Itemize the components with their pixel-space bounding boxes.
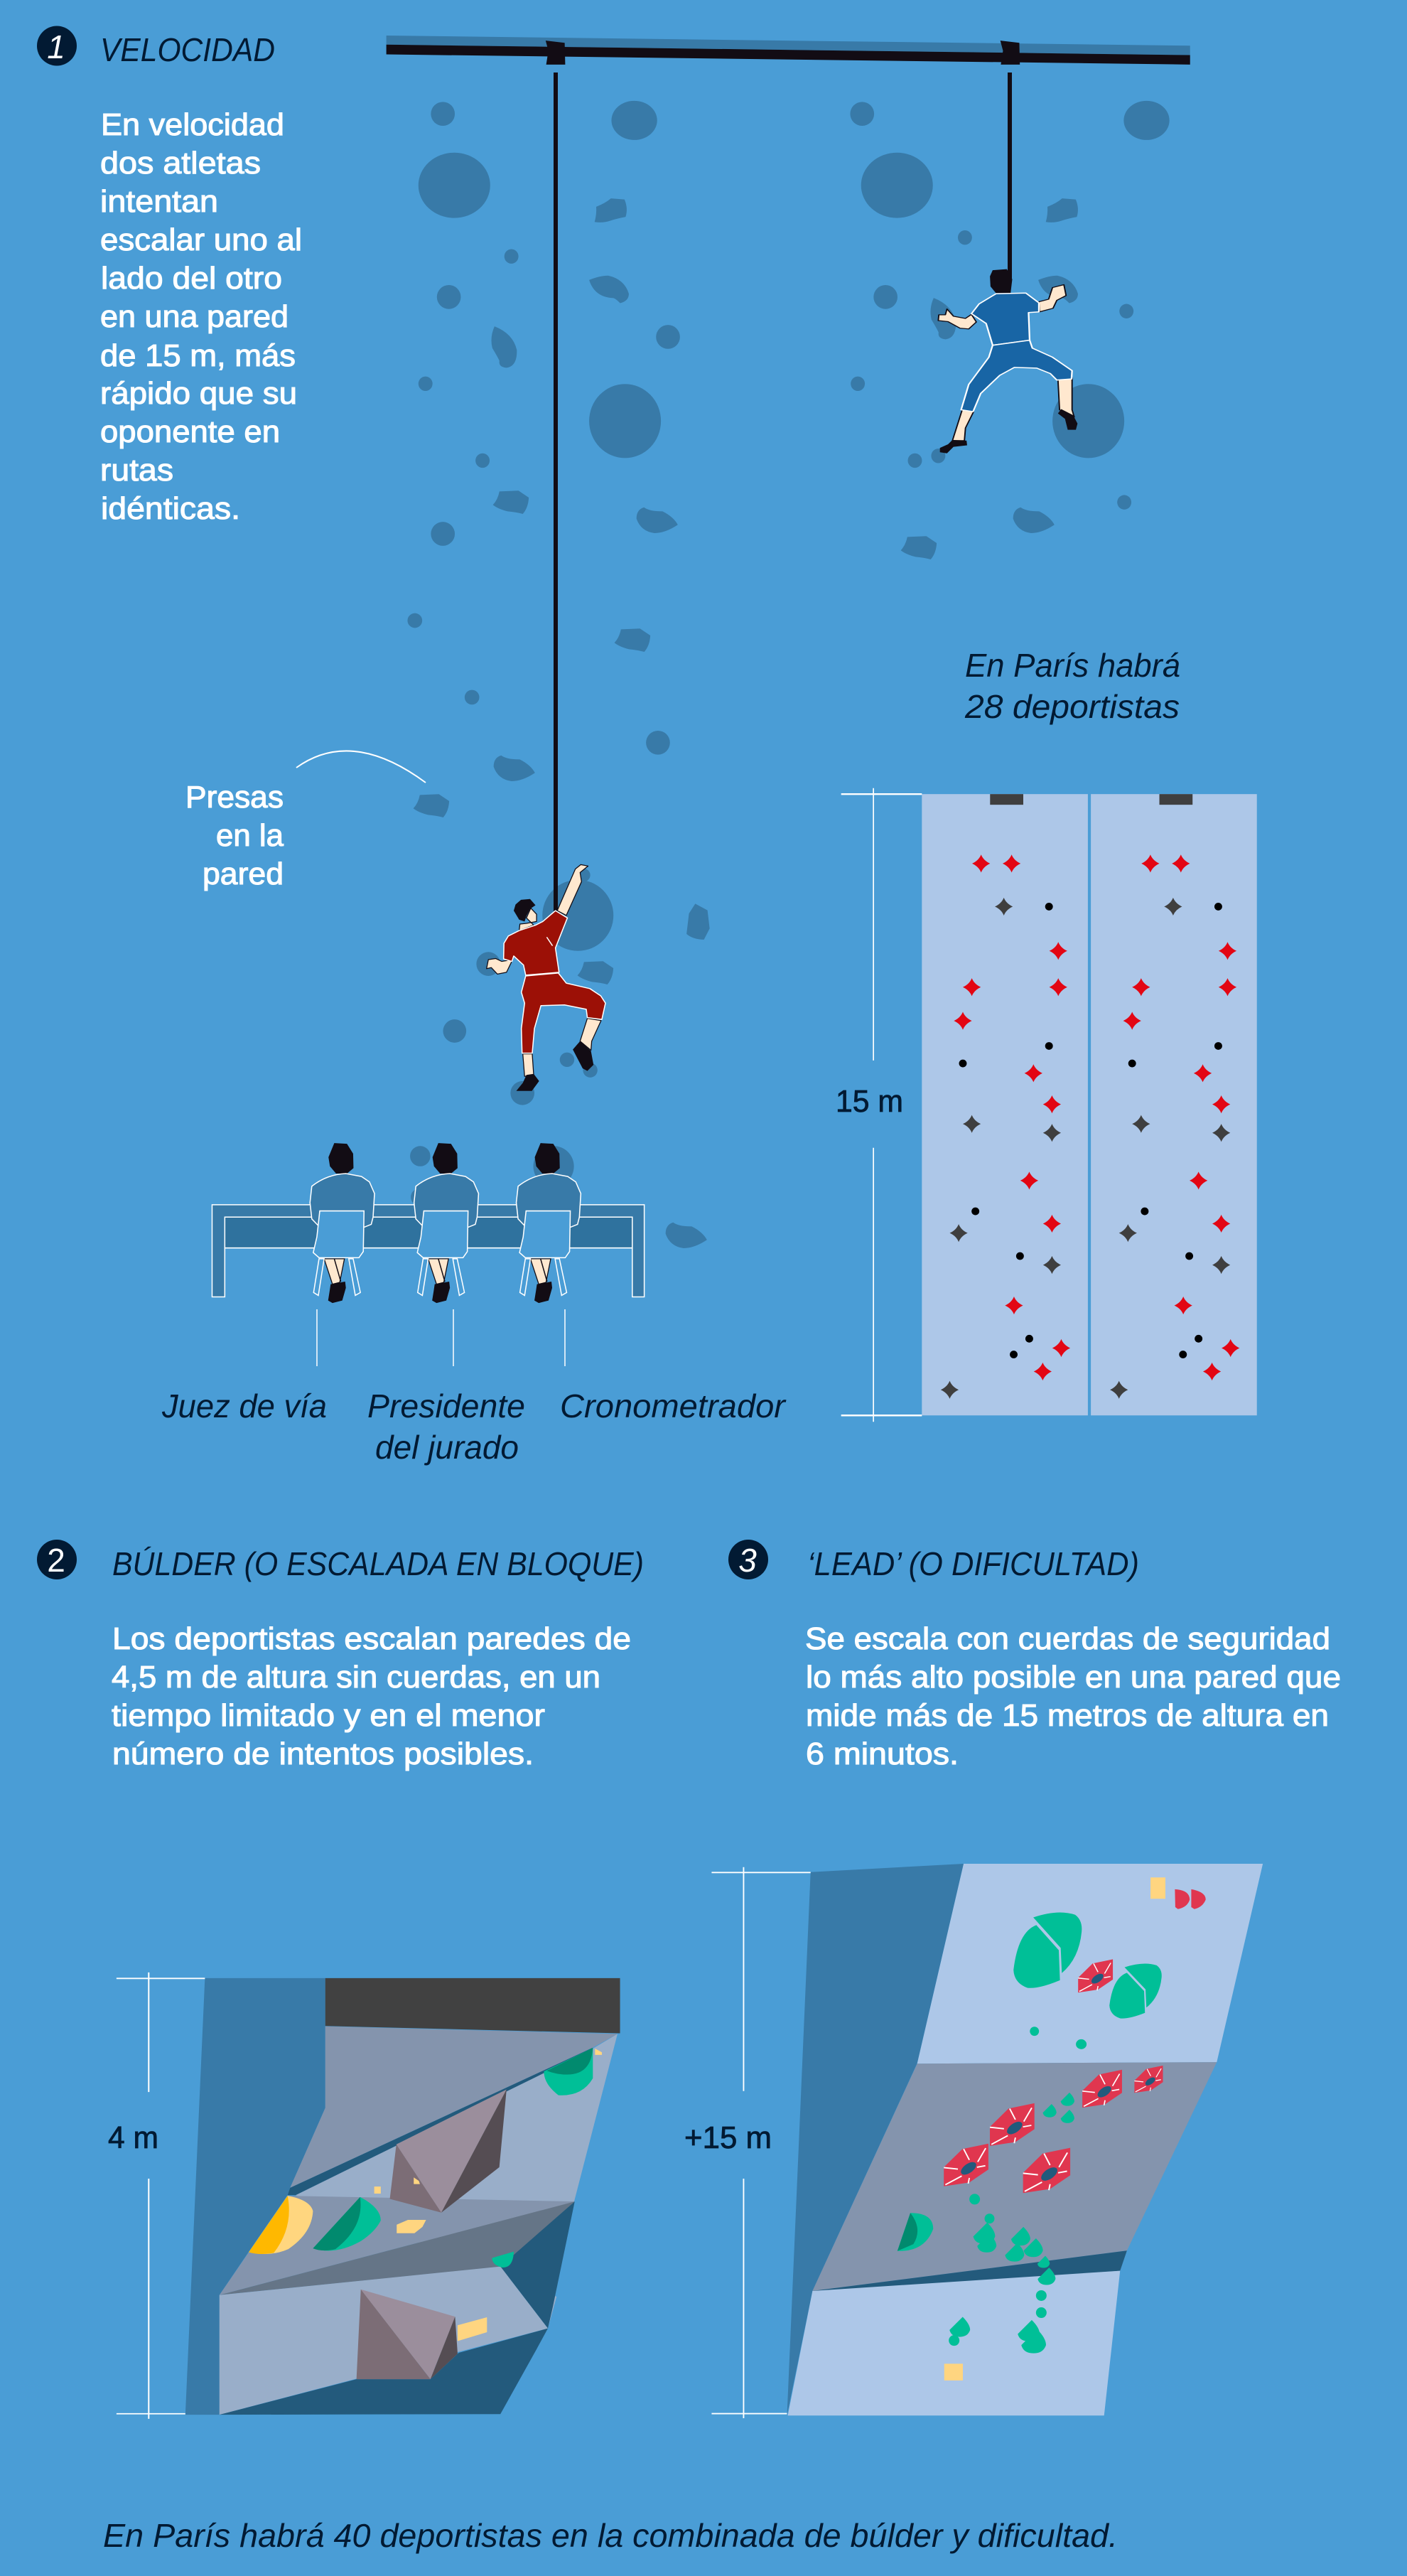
text block: velocidad description: lado del otro xyxy=(101,261,282,296)
text block: búlder description: 4,5 m de altura sin cuerdas, en un xyxy=(112,1660,600,1695)
text block: velocidad description: rápido que su xyxy=(100,376,297,411)
wall lane left xyxy=(922,794,1088,1415)
number badge 3: 3 xyxy=(738,1542,757,1579)
text block: búlder description: número de intentos posibles. xyxy=(112,1737,534,1771)
section 1 heading: velocidad xyxy=(37,26,275,68)
height dimension line xyxy=(711,1867,811,2418)
pyramid hold upper xyxy=(390,2090,507,2213)
green small holds xyxy=(949,2027,1087,2354)
wall lane right xyxy=(1091,794,1257,1415)
speed wall holds xyxy=(407,101,1170,1248)
number badge 3 xyxy=(728,1540,768,1579)
label: 15 m: 15 m xyxy=(836,1084,903,1119)
label: 28 deportistas xyxy=(964,647,1180,725)
label: cronometrador: Cronometrador xyxy=(560,1388,787,1424)
climber: red athlete xyxy=(487,864,605,1091)
callout: presas en la pared: pared xyxy=(203,857,284,891)
text block: lead description xyxy=(805,1621,1341,1771)
small green hold xyxy=(492,2252,514,2268)
yellow holds xyxy=(944,1877,1165,2381)
text block: velocidad description: idénticas. xyxy=(101,491,240,526)
text block: lead description: lo más alto posible en una pared que xyxy=(806,1660,1341,1695)
heading text: BÚLDER (O ESCALADA EN BLOQUE) xyxy=(112,1545,644,1582)
callout curve xyxy=(296,751,426,783)
green half volume xyxy=(897,2213,933,2251)
text block: búlder description: tiempo limitado y en el menor xyxy=(112,1698,545,1733)
text block: velocidad description: En velocidad xyxy=(101,107,284,142)
callout: presas en la pared: Presas xyxy=(185,780,284,815)
text block: búlder description: Los deportistas escalan paredes de xyxy=(112,1621,631,1656)
text block: velocidad description: intentan xyxy=(100,184,218,219)
climber: blue athlete xyxy=(938,269,1077,454)
judge label leader lines xyxy=(317,1309,565,1366)
number badge 1 xyxy=(37,26,77,65)
text block: búlder description xyxy=(112,1621,631,1771)
number badge 2: 2 xyxy=(47,1542,65,1579)
judge 2 xyxy=(414,1143,478,1303)
number badge 2 xyxy=(37,1540,77,1579)
lead wall xyxy=(711,1864,1263,2418)
callout: presas en la pared xyxy=(185,780,284,891)
label: 4 m: 4 m xyxy=(108,2120,158,2155)
label: 28 deportistas: 28 deportistas xyxy=(964,688,1180,725)
text block: lead description: Se escala con cuerdas de seguridad xyxy=(805,1621,1330,1656)
height dimension line xyxy=(841,788,922,1422)
text block: velocidad description: en una pared xyxy=(100,299,289,334)
speed wall route diagram xyxy=(841,788,1257,1422)
heading text: VELOCIDAD xyxy=(100,31,275,68)
callout: presas en la pared: en la xyxy=(216,818,284,853)
section 2 heading: búlder xyxy=(37,1540,644,1582)
text block: lead description: 6 minutos. xyxy=(806,1737,959,1771)
pyramid hold lower xyxy=(357,2290,458,2379)
green volume large xyxy=(1013,1912,1082,1988)
rope: right xyxy=(1008,73,1012,282)
top bar with clamps xyxy=(387,36,1190,65)
red holds top xyxy=(1175,1889,1206,1909)
text block: lead description: mide más de 15 metros de altura en xyxy=(806,1698,1329,1733)
judges table xyxy=(212,1143,645,1303)
rope: left xyxy=(554,73,558,911)
number badge 1: 1 xyxy=(47,28,65,65)
text block: velocidad description: de 15 m, más xyxy=(100,338,296,373)
text block: velocidad description: oponente en xyxy=(100,414,280,449)
judge 1 xyxy=(310,1143,374,1303)
label: presidente del jurado: Presidente xyxy=(367,1388,525,1424)
heading text: ‘LEAD’ (O DIFICULTAD) xyxy=(807,1545,1139,1582)
green volume xyxy=(313,2197,381,2250)
footer note: En París habrá 40 deportistas en la combinada de búlder y dificultad. xyxy=(103,2517,1118,2554)
yellow holds xyxy=(374,2049,602,2341)
label: presidente del jurado: del jurado xyxy=(375,1429,519,1466)
label: 28 deportistas: En París habrá xyxy=(965,647,1180,684)
bouldering wall xyxy=(117,1973,620,2419)
text block: velocidad description: dos atletas xyxy=(100,146,261,181)
text block: velocidad description: rutas xyxy=(100,453,173,488)
height dimension line xyxy=(117,1973,205,2419)
judge 3 xyxy=(517,1143,581,1303)
label: juez de vía: Juez de vía xyxy=(161,1388,327,1424)
red rock holds xyxy=(944,1959,1163,2193)
text block: velocidad description xyxy=(100,107,302,526)
green volume medium xyxy=(1109,1964,1162,2019)
section 3 heading: lead xyxy=(728,1540,1139,1582)
text block: velocidad description: escalar uno al xyxy=(100,222,302,257)
label: presidente del jurado xyxy=(367,1388,525,1466)
yellow volume xyxy=(249,2196,313,2254)
label: +15 m: +15 m xyxy=(684,2120,772,2155)
green volume top xyxy=(544,2048,593,2095)
